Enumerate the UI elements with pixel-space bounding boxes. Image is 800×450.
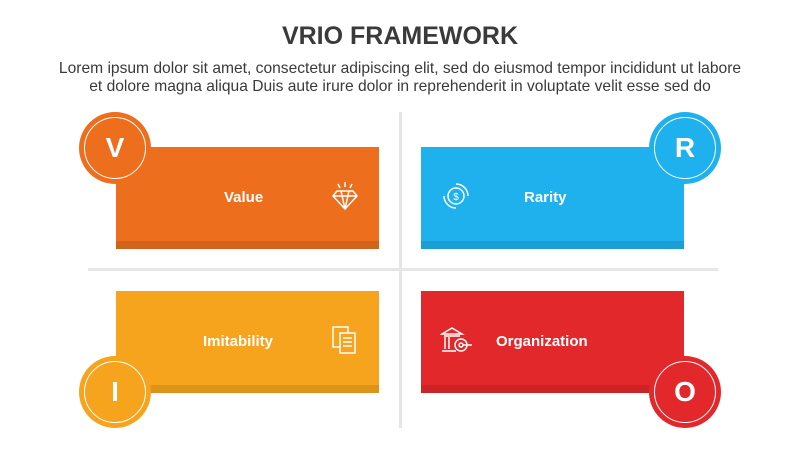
label: organization: Organization <box>496 333 588 350</box>
subtitle: et dolore magna aliqua Duis aute irure dolor in reprehenderit in voluptate velit esse sed do <box>89 78 711 94</box>
circle: I <box>79 356 151 428</box>
label: value: Value <box>224 189 263 206</box>
circle: R: R <box>675 132 695 163</box>
icon: diamond <box>332 182 358 210</box>
circle: O: O <box>674 376 696 407</box>
panel: imitability <box>116 291 379 393</box>
panel: value <box>116 147 379 249</box>
subtitle <box>59 60 741 94</box>
title: VRIO FRAMEWORK <box>282 22 518 50</box>
icon: building target <box>440 327 472 352</box>
subtitle: Lorem ipsum dolor sit amet, consectetur adipiscing elit, sed do eiusmod tempor incididunt ut labore <box>59 60 741 77</box>
circle: V <box>79 112 151 184</box>
panel: rarity <box>421 147 684 249</box>
circle: R <box>649 112 721 184</box>
circle: O <box>649 356 721 428</box>
icon: coin <box>443 183 469 209</box>
circle: V: V <box>106 132 124 163</box>
icon: coin: $ <box>453 192 459 203</box>
label: imitability: Imitability <box>203 333 273 350</box>
panel: organization <box>421 291 684 393</box>
icon: documents <box>332 326 356 354</box>
label: rarity: Rarity <box>524 189 567 206</box>
circle: I: I <box>111 376 119 407</box>
